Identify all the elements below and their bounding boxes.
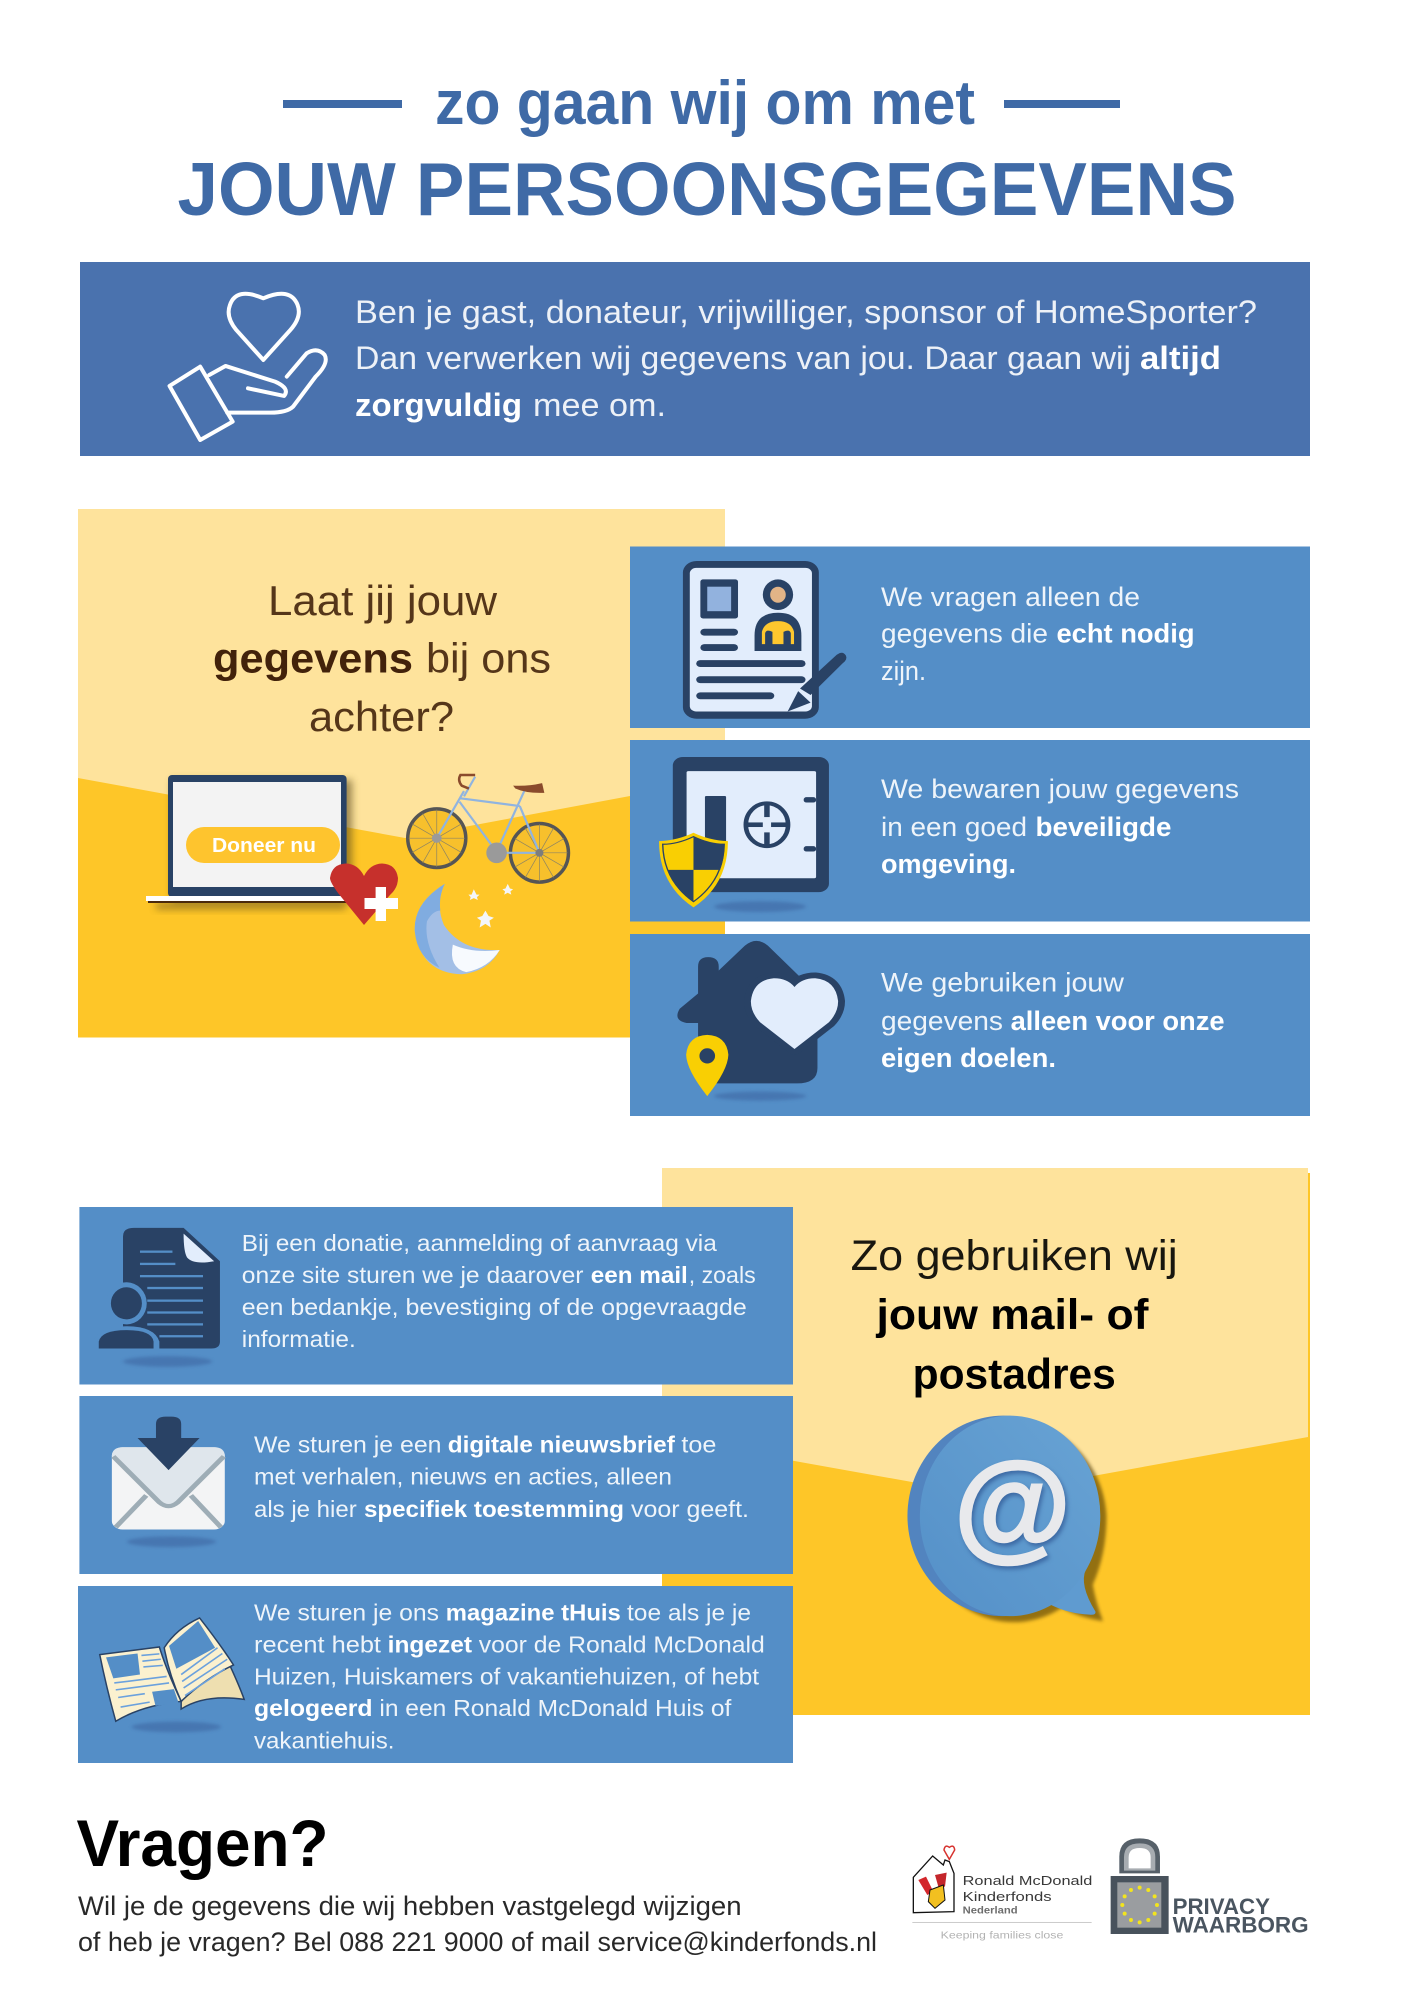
logo: Ronald McDonald Kinderfonds: Keeping families close — [941, 1931, 1063, 1942]
intro text: altijd — [1140, 340, 1221, 376]
text: eigen doelen: gegevens — [881, 1006, 1003, 1036]
logo: Ronald McDonald Kinderfonds: Ronald McDonald — [963, 1873, 1092, 1888]
panel: gegevens achterlaten — [78, 509, 725, 1038]
heading: zo gebruiken wij: Zo gebruiken wij — [851, 1232, 1178, 1280]
text: echt nodig: echt nodig — [1056, 619, 1194, 649]
icon: heart with cross — [330, 864, 398, 925]
text: magazine tHuis: magazine tHuis — [446, 1600, 621, 1626]
card: digitale nieuwsbrief — [79, 1396, 793, 1574]
text: magazine tHuis: voor de Ronald McDonald — [479, 1631, 765, 1657]
icon: laptop with donate button — [146, 775, 352, 909]
heading: zo gebruiken wij: postadres — [913, 1350, 1116, 1398]
icon: document with person and pen — [683, 561, 846, 719]
text: magazine tHuis — [254, 1600, 765, 1753]
icon: envelope with arrow — [112, 1417, 225, 1547]
panel: mail- of postadres — [662, 1168, 1310, 1715]
panel: intro banner — [80, 262, 1310, 456]
heading: laat jij jouw gegevens: Laat jij jouw — [268, 577, 498, 624]
card: alleen voor onze eigen doelen — [630, 934, 1310, 1116]
heading: zo gebruiken wij — [851, 1232, 1178, 1398]
icon: moon and stars — [415, 884, 513, 974]
text: magazine tHuis: recent hebt — [254, 1631, 381, 1657]
heading: laat jij jouw gegevens: bij ons — [426, 634, 551, 682]
text: digitale nieuwsbrief: specifiek toestemming — [364, 1496, 624, 1522]
text: magazine tHuis: Huizen, Huiskamers of vakantiehuizen, of hebt — [254, 1664, 759, 1690]
card: een mail — [79, 1207, 793, 1384]
heading: laat jij jouw gegevens: gegevens — [213, 634, 413, 682]
text: beveiligde omgeving: We bewaren jouw gegevens — [881, 774, 1239, 804]
text: beveiligde omgeving — [881, 774, 1239, 879]
text: magazine tHuis: We sturen je ons — [254, 1600, 439, 1626]
text: digitale nieuwsbrief: voor geeft. — [631, 1496, 749, 1522]
card: goed beveiligde omgeving — [630, 740, 1310, 922]
text: beveiligde omgeving: beveiligde — [1036, 812, 1172, 842]
text: digitale nieuwsbrief: met verhalen, nieuws en acties, alleen — [254, 1464, 672, 1490]
text: contact information — [78, 1891, 877, 1957]
title: JOUW PERSOONSGEGEVENS — [178, 147, 1236, 231]
logo: Privacy Waarborg: PRIVACY — [1173, 1894, 1270, 1919]
title — [178, 69, 1236, 231]
text: contact information: of heb je vragen? Bel 088 221 9000 of mail service@kinderfonds.nl — [78, 1927, 877, 1957]
text: eigen doelen: alleen voor onze — [1011, 1006, 1225, 1036]
heading: vragen: Vragen? — [76, 1806, 328, 1880]
text: magazine tHuis: in een Ronald McDonald Huis of — [379, 1695, 732, 1721]
text: eigen doelen: We gebruiken jouw — [881, 968, 1125, 998]
heading: laat jij jouw gegevens — [213, 577, 551, 740]
heading: zo gebruiken wij: jouw mail- of — [875, 1291, 1149, 1339]
text: een mail: Bij een donatie, aanmelding of aanvraag via — [242, 1230, 718, 1256]
text: magazine tHuis: vakantiehuis. — [254, 1727, 394, 1753]
text: echt nodig: zijn. — [881, 656, 926, 686]
icon: bicycle — [408, 775, 568, 882]
heading: laat jij jouw gegevens: achter? — [309, 693, 454, 740]
text: eigen doelen — [881, 968, 1225, 1073]
text: magazine tHuis: gelogeerd — [254, 1695, 373, 1721]
text: digitale nieuwsbrief: als je hier — [254, 1496, 357, 1522]
button: doneer nu: Doneer nu — [212, 835, 316, 857]
icon: safe with shield — [659, 757, 829, 912]
icon: at-sign speech bubble: @ — [952, 1440, 1069, 1574]
card: gegevens die echt nodig zijn — [630, 546, 1310, 728]
text: een mail: een mail — [591, 1262, 688, 1288]
text: digitale nieuwsbrief: toe — [681, 1432, 716, 1458]
text: een mail: onze site sturen we je daarover — [242, 1262, 584, 1288]
intro text: Ben je gast, donateur, vrijwilliger, sponsor of HomeSporter? — [355, 294, 1257, 330]
text: een mail: een bedankje, bevestiging of de opgevraagde — [242, 1294, 747, 1320]
logo: Ronald McDonald Kinderfonds: Kinderfonds — [963, 1889, 1052, 1904]
intro text: Dan verwerken wij gegevens van jou. Daar gaan wij — [355, 340, 1131, 376]
icon: document with person — [94, 1228, 220, 1367]
text: echt nodig: gegevens die — [881, 619, 1048, 649]
text: beveiligde omgeving: omgeving. — [881, 849, 1016, 879]
logo: Privacy Waarborg — [1111, 1838, 1309, 1938]
text: een mail — [242, 1230, 756, 1352]
title: zo gaan wij om met — [435, 69, 975, 138]
card: magazine tHuis — [78, 1586, 793, 1763]
text: een mail: informatie. — [242, 1326, 356, 1352]
icon: open magazine — [100, 1618, 244, 1732]
text: digitale nieuwsbrief: We sturen je een — [254, 1432, 442, 1458]
logo: Ronald McDonald Kinderfonds: Nederland — [963, 1905, 1018, 1916]
icon: house with heart and pin — [677, 941, 838, 1101]
text: magazine tHuis: ingezet — [388, 1631, 472, 1657]
icon: at-sign speech bubble — [907, 1416, 1107, 1622]
intro text — [355, 294, 1257, 423]
text: een mail: , zoals — [689, 1262, 756, 1288]
intro text: zorgvuldig — [355, 387, 522, 423]
text: contact information: Wil je de gegevens die wij hebben vastgelegd wijzigen — [78, 1891, 742, 1921]
text: beveiligde omgeving: in een goed — [881, 812, 1027, 842]
logo: Privacy Waarborg: WAARBORG — [1173, 1913, 1309, 1938]
text: echt nodig: We vragen alleen de — [881, 582, 1140, 612]
text: digitale nieuwsbrief: digitale nieuwsbrief — [448, 1432, 675, 1458]
text: eigen doelen: eigen doelen. — [881, 1043, 1056, 1073]
text: magazine tHuis: toe als je je — [627, 1600, 751, 1626]
icon: hand holding heart — [170, 294, 326, 440]
button: doneer nu — [186, 827, 340, 863]
text: digitale nieuwsbrief — [254, 1432, 749, 1522]
logo: Ronald McDonald Kinderfonds — [912, 1846, 1092, 1942]
intro text: mee om. — [533, 387, 666, 423]
text: echt nodig — [881, 582, 1194, 686]
